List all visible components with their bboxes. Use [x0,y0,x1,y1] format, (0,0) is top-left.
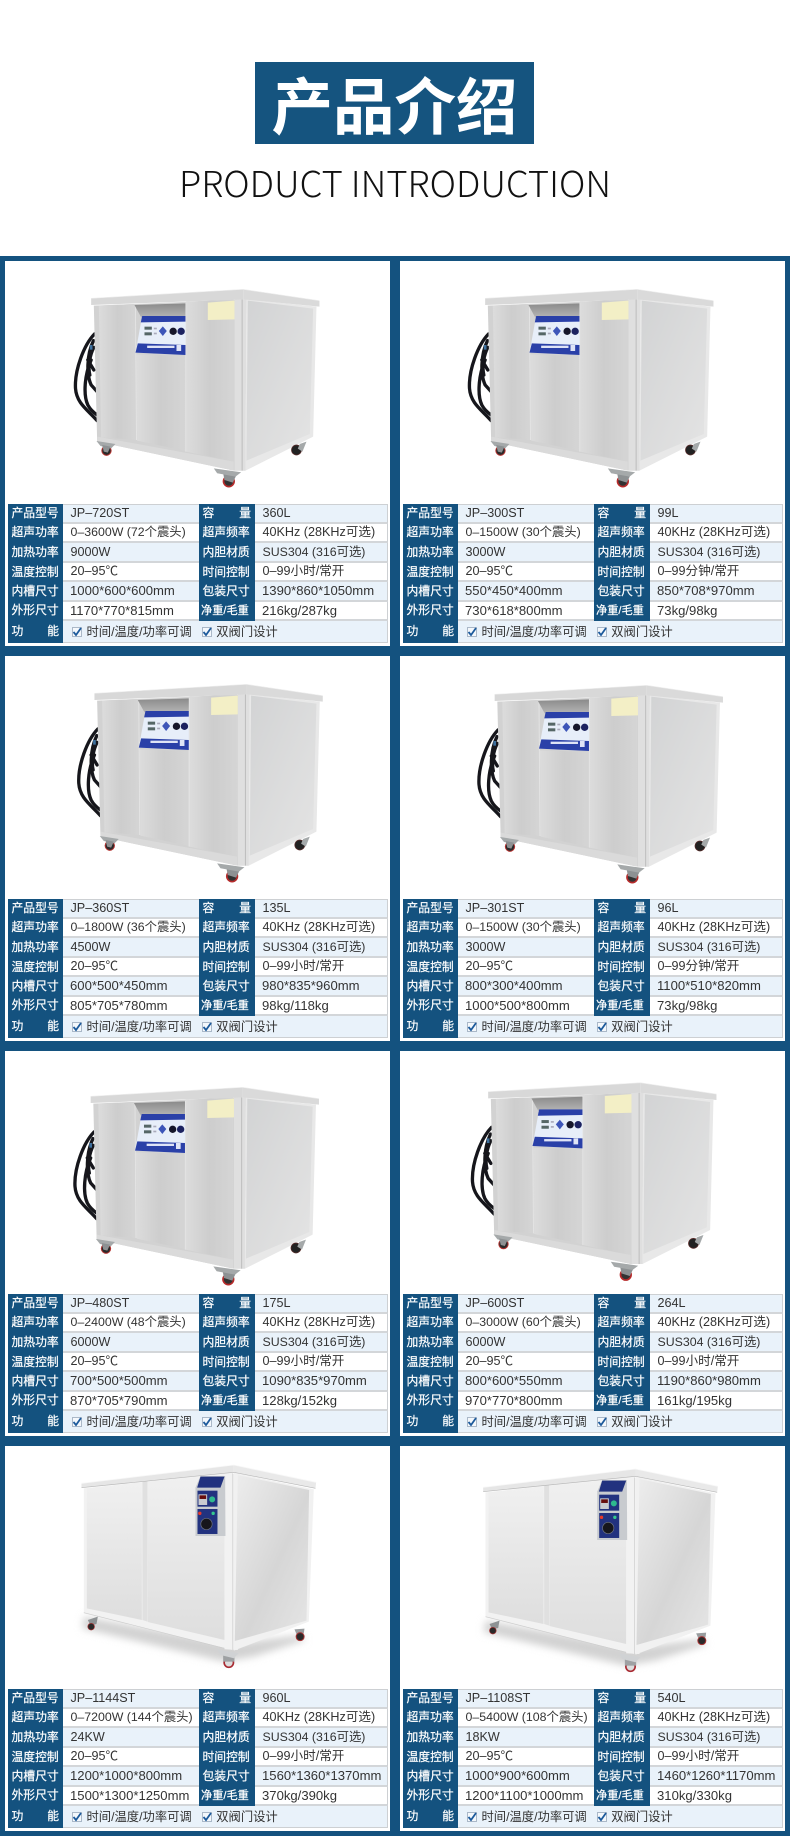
spec table: JP-360ST: 加热功率 [12,940,59,954]
spec table: JP-1108ST: 时间控制 [598,1750,645,1764]
spec table: JP-1108ST: 能 [442,1809,454,1823]
spec table: JP-300ST: 双阀门设计 [611,625,673,639]
spec table: JP-720ST: 216kg/287kg [262,603,337,618]
spec table: JP-300ST: 20–95℃ [466,564,513,578]
spec table: JP-1144ST: 20–95℃ [70,1749,118,1763]
spec table: JP-1108ST: 1200*1100*1000mm [465,1788,583,1803]
spec table: JP-300ST: 包装尺寸 [598,584,645,598]
spec table: JP-360ST: 双阀门设计 [216,1020,278,1034]
spec table: JP-480ST: 时间控制 [202,1355,250,1369]
spec table: JP-720ST: 时间/温度/功率可调 [86,625,192,639]
title banner: 产品介绍 [271,58,518,147]
spec table: JP-300ST: 外形尺寸 [406,603,454,617]
spec table: JP-1108ST: 内胆材质 [598,1730,645,1744]
spec table: JP-300ST: 3000W [466,545,505,559]
spec table: JP-300ST: 量 [634,506,646,520]
spec table: JP-300ST: 超声功率 [406,525,454,539]
spec table: JP-360ST: 805*705*780mm [70,998,168,1013]
spec table: JP-1108ST: 净重/毛重 [596,1790,644,1802]
spec table: JP-720ST: 40KHz (28KHz可选) [262,525,375,539]
spec table: JP-720ST: 内槽尺寸 [12,584,59,598]
spec table: JP-300ST: 温度控制 [406,565,454,579]
spec table: JP-360ST: 温度控制 [12,960,59,974]
spec table: JP-301ST: 量 [634,901,646,915]
spec table: JP-300ST: 功 [406,624,418,638]
spec table: JP-1108ST: 容 [598,1691,609,1705]
spec table: JP-360ST: 超声频率 [202,920,250,934]
spec table: JP-1144ST: 超声功率 [12,1710,59,1724]
spec table: JP-360ST: 能 [47,1019,59,1033]
panel: JP-360ST [4,656,390,1041]
spec table: JP-480ST: 容 [202,1296,214,1310]
spec table: JP-600ST: 1190*860*980mm [657,1373,761,1388]
spec table: JP-301ST: SUS304 (316可选) [658,940,760,954]
spec table: JP-600ST: 161kg/195kg [657,1393,732,1408]
panel: JP-301ST [400,656,785,1041]
spec table: JP-1144ST: 加热功率 [12,1730,59,1744]
spec table: JP-1144ST: 1500*1300*1250mm [70,1788,189,1803]
spec table: JP-1108ST: 加热功率 [406,1730,454,1744]
spec table: JP-1108ST: 1000*900*600mm [465,1768,570,1783]
spec table: JP-1144ST: 双阀门设计 [216,1810,278,1824]
spec table: JP-1108ST: 超声功率 [406,1710,454,1724]
panel: JP-720ST [4,261,390,646]
spec table: JP-300ST: SUS304 (316可选) [658,545,760,559]
product photo: JP-1108ST [482,1470,718,1672]
spec table: JP-301ST: 能 [442,1019,454,1033]
spec table: JP-360ST: 980*835*960mm [262,978,360,993]
spec table: JP-360ST: 净重/毛重 [201,1000,249,1012]
spec table: JP-1144ST: 内槽尺寸 [12,1769,59,1783]
spec table: JP-360ST: JP–360ST [70,901,129,915]
spec table: JP-720ST: 9000W [70,545,110,559]
spec table: JP-1144ST: 产品型号 [12,1691,59,1705]
spec table: JP-360ST: 内槽尺寸 [12,979,59,993]
spec table: JP-301ST: 超声频率 [598,920,645,934]
spec table: JP-301ST: 0–99分钟/常开 [658,959,739,973]
spec table: JP-480ST: 超声频率 [202,1315,250,1329]
spec table: JP-720ST: 产品型号 [12,506,59,520]
spec table: JP-600ST: 20–95℃ [466,1354,513,1368]
spec table: JP-1144ST: 时间/温度/功率可调 [86,1810,192,1824]
spec table: JP-480ST: 175L [262,1296,291,1310]
spec table: JP-301ST: 800*300*400mm [465,978,563,993]
spec table: JP-600ST: 加热功率 [406,1335,454,1349]
product photo: JP-301ST [477,685,723,884]
spec table: JP-720ST: 量 [239,506,251,520]
spec table: JP-1108ST: 内槽尺寸 [406,1769,454,1783]
spec table: JP-720ST: 时间控制 [202,565,250,579]
spec table: JP-300ST: 容 [598,506,609,520]
spec table: JP-600ST: 功 [406,1414,418,1428]
spec table: JP-1144ST: 1560*1360*1370mm [262,1768,381,1783]
spec table: JP-480ST: 包装尺寸 [202,1374,250,1388]
spec table: JP-1108ST: 量 [634,1691,646,1705]
spec table: JP-360ST: 40KHz (28KHz可选) [262,920,375,934]
spec table: JP-480ST: 双阀门设计 [216,1415,278,1429]
spec table: JP-1144ST: 超声频率 [202,1710,250,1724]
spec table: JP-600ST: 双阀门设计 [611,1415,673,1429]
spec table: JP-720ST: 1000*600*600mm [70,583,175,598]
spec table: JP-360ST: 量 [239,901,251,915]
spec table: JP-300ST: 99L [658,506,679,520]
spec table: JP-1108ST: 40KHz (28KHz可选) [658,1710,770,1724]
spec table: JP-1144ST: 容 [202,1691,214,1705]
product photo: JP-720ST [74,289,320,488]
spec table: JP-301ST: 净重/毛重 [596,1000,644,1012]
spec table: JP-301ST: 功 [406,1019,418,1033]
spec table: JP-301ST: 加热功率 [406,940,454,954]
spec table: JP-480ST: 加热功率 [12,1335,59,1349]
spec table: JP-300ST: 超声频率 [598,525,645,539]
panel: JP-1108ST [400,1446,785,1831]
spec table: JP-1108ST: 产品型号 [406,1691,454,1705]
spec table: JP-301ST: 内槽尺寸 [406,979,454,993]
spec table: JP-480ST: 0–2400W (48个震头) [70,1315,186,1329]
spec table: JP-600ST: 净重/毛重 [596,1395,644,1407]
spec table: JP-600ST: 外形尺寸 [406,1393,454,1407]
spec table: JP-480ST: 40KHz (28KHz可选) [262,1315,375,1329]
spec table: JP-720ST: 功 [12,624,23,638]
spec table: JP-1144ST: SUS304 (316可选) [262,1730,365,1744]
spec table: JP-1108ST [403,1689,783,1828]
spec table: JP-480ST: 6000W [70,1335,110,1349]
spec table: JP-300ST: 时间/温度/功率可调 [482,625,587,639]
spec table: JP-300ST: 0–99分钟/常开 [658,564,739,578]
spec table: JP-300ST: 加热功率 [406,545,454,559]
spec table: JP-600ST: 容 [598,1296,609,1310]
spec table: JP-301ST [403,899,783,1038]
spec table: JP-1144ST: 外形尺寸 [12,1788,59,1802]
spec table: JP-1108ST: JP–1108ST [466,1691,530,1705]
spec table: JP-1144ST: 能 [47,1809,59,1823]
product photo: JP-480ST [73,1087,319,1286]
spec table: JP-1144ST: 温度控制 [12,1750,59,1764]
spec table: JP-301ST: 容 [598,901,609,915]
spec table: JP-1108ST: SUS304 (316可选) [658,1730,760,1744]
spec table: JP-600ST: 264L [658,1296,686,1310]
spec table: JP-600ST: 6000W [466,1335,505,1349]
spec table: JP-300ST: 时间控制 [598,565,645,579]
panel: JP-1144ST [4,1446,390,1831]
spec table: JP-360ST: 时间控制 [202,960,250,974]
spec table: JP-600ST: 时间控制 [598,1355,645,1369]
spec table: JP-720ST: 360L [262,506,291,520]
spec table: JP-480ST: 量 [239,1296,251,1310]
spec table: JP-600ST: 超声功率 [406,1315,454,1329]
spec table: JP-1144ST: 包装尺寸 [202,1769,250,1783]
spec table: JP-600ST [403,1294,783,1433]
spec table: JP-1144ST: 净重/毛重 [201,1790,249,1802]
spec table: JP-1108ST: 0–99小时/常开 [658,1749,739,1763]
product photo: JP-600ST [470,1082,716,1281]
spec table: JP-300ST: 550*450*400mm [465,583,563,598]
spec table: JP-1144ST: 1200*1000*800mm [70,1768,182,1783]
spec table: JP-1108ST: 0–5400W (108个震头) [466,1710,588,1724]
spec table: JP-301ST: 20–95℃ [466,959,513,973]
spec table: JP-720ST: 净重/毛重 [201,605,249,617]
product photo: JP-360ST [77,684,323,882]
spec table: JP-1144ST: 时间控制 [202,1750,250,1764]
spec table: JP-300ST: 能 [442,624,454,638]
panel: JP-600ST [400,1051,785,1436]
spec table: JP-1108ST: 双阀门设计 [611,1810,673,1824]
spec table: JP-301ST: 3000W [466,940,505,954]
spec table: JP-301ST: 时间/温度/功率可调 [482,1020,587,1034]
spec table: JP-720ST: 0–99小时/常开 [262,564,344,578]
spec table: JP-1108ST: 外形尺寸 [406,1788,454,1802]
spec table: JP-360ST: SUS304 (316可选) [262,940,365,954]
spec table: JP-600ST: 970*770*800mm [465,1393,563,1408]
spec table: JP-300ST: 净重/毛重 [596,605,644,617]
spec table: JP-300ST: 内胆材质 [598,545,645,559]
spec table: JP-480ST [8,1294,388,1433]
spec table: JP-360ST: 功 [12,1019,23,1033]
spec table: JP-720ST: 0–3600W (72个震头) [70,525,186,539]
spec table: JP-300ST: JP–300ST [466,506,524,520]
spec table: JP-360ST: 时间/温度/功率可调 [86,1020,192,1034]
spec table: JP-301ST: 96L [658,901,679,915]
spec table: JP-301ST: 0–1500W (30个震头) [466,920,581,934]
spec table: JP-1108ST: 1460*1260*1170mm [657,1768,775,1783]
product photo: JP-1144ST [80,1466,316,1668]
spec table: JP-360ST: 产品型号 [12,901,59,915]
spec table: JP-1144ST: 量 [239,1691,251,1705]
spec table: JP-300ST: 0–1500W (30个震头) [466,525,581,539]
spec table: JP-360ST: 0–99小时/常开 [262,959,344,973]
spec table: JP-1144ST [8,1689,388,1828]
spec table: JP-480ST: 内胆材质 [202,1335,250,1349]
spec table: JP-600ST: SUS304 (316可选) [658,1335,760,1349]
spec table: JP-1144ST: JP–1144ST [70,1691,135,1705]
spec table: JP-300ST: 产品型号 [406,506,454,520]
spec table: JP-480ST: 功 [12,1414,23,1428]
spec table: JP-480ST: 700*500*500mm [70,1373,168,1388]
spec table: JP-1144ST: 40KHz (28KHz可选) [262,1710,375,1724]
spec table: JP-1108ST: 18KW [466,1730,500,1744]
spec table: JP-600ST: 0–3000W (60个震头) [466,1315,581,1329]
spec table: JP-480ST: 产品型号 [12,1296,59,1310]
spec table: JP-600ST: 时间/温度/功率可调 [482,1415,587,1429]
spec table: JP-1108ST: 功 [406,1809,418,1823]
spec table: JP-600ST: 包装尺寸 [598,1374,645,1388]
panel: JP-480ST [4,1051,390,1436]
spec table: JP-480ST: 0–99小时/常开 [262,1354,344,1368]
spec table: JP-301ST: 1100*510*820mm [657,978,761,993]
spec table: JP-301ST: 包装尺寸 [598,979,645,993]
spec table: JP-1144ST: 内胆材质 [202,1730,250,1744]
spec table: JP-720ST: 内胆材质 [202,545,250,559]
spec table: JP-720ST: 能 [47,624,59,638]
spec table: JP-720ST: 温度控制 [12,565,59,579]
spec table: JP-360ST: 0–1800W (36个震头) [70,920,186,934]
spec table: JP-1144ST: 370kg/390kg [262,1788,337,1803]
spec table: JP-360ST [8,899,388,1038]
spec table: JP-301ST: 超声功率 [406,920,454,934]
spec table: JP-301ST: 产品型号 [406,901,454,915]
spec table: JP-1108ST: 310kg/330kg [657,1788,732,1803]
spec table: JP-360ST: 超声功率 [12,920,59,934]
spec table: JP-301ST: 73kg/98kg [657,998,717,1013]
spec table: JP-720ST: 超声功率 [12,525,59,539]
spec table: JP-480ST: 时间/温度/功率可调 [86,1415,192,1429]
spec table: JP-360ST: 4500W [70,940,110,954]
spec table: JP-720ST: 20–95℃ [70,564,118,578]
spec table: JP-300ST: 850*708*970mm [657,583,755,598]
spec table: JP-301ST: 外形尺寸 [406,998,454,1012]
spec table: JP-720ST: 包装尺寸 [202,584,250,598]
spec table: JP-360ST: 外形尺寸 [12,998,59,1012]
spec table: JP-600ST: 能 [442,1414,454,1428]
spec table: JP-301ST: 1000*500*800mm [465,998,570,1013]
product photo: JP-300ST [468,289,714,488]
spec table: JP-720ST: 外形尺寸 [12,603,59,617]
spec table: JP-480ST: 超声功率 [12,1315,59,1329]
spec table: JP-720ST: JP–720ST [70,506,129,520]
spec table: JP-1108ST: 540L [658,1691,686,1705]
spec table: JP-600ST: 产品型号 [406,1296,454,1310]
spec table: JP-720ST: 容 [202,506,214,520]
spec table: JP-1108ST: 包装尺寸 [598,1769,645,1783]
spec table: JP-600ST: 温度控制 [406,1355,454,1369]
spec table: JP-300ST: 内槽尺寸 [406,584,454,598]
panel: JP-300ST [400,261,785,646]
spec table: JP-1144ST: 功 [12,1809,23,1823]
spec table: JP-480ST: 20–95℃ [70,1354,118,1368]
spec table: JP-600ST: 量 [634,1296,646,1310]
spec table: JP-600ST: 超声频率 [598,1315,645,1329]
spec table: JP-300ST: 730*618*800mm [465,603,563,618]
spec table: JP-300ST: 40KHz (28KHz可选) [658,525,770,539]
spec table: JP-720ST [8,504,388,643]
spec table: JP-720ST: 1390*860*1050mm [262,583,374,598]
spec table: JP-360ST: 包装尺寸 [202,979,250,993]
spec table: JP-1144ST: 24KW [70,1730,105,1744]
spec table: JP-301ST: 内胆材质 [598,940,645,954]
spec table: JP-480ST: 净重/毛重 [201,1395,249,1407]
spec table: JP-480ST: 内槽尺寸 [12,1374,59,1388]
spec table: JP-1108ST: 时间/温度/功率可调 [482,1810,587,1824]
spec table: JP-1108ST: 20–95℃ [466,1749,513,1763]
spec table: JP-480ST: SUS304 (316可选) [262,1335,365,1349]
spec table: JP-480ST: JP–480ST [70,1296,129,1310]
spec table: JP-720ST: 超声频率 [202,525,250,539]
spec table: JP-1108ST: 温度控制 [406,1750,454,1764]
spec table: JP-360ST: 600*500*450mm [70,978,168,993]
spec table: JP-600ST: 800*600*550mm [465,1373,563,1388]
spec table: JP-720ST: 加热功率 [12,545,59,559]
spec table: JP-360ST: 135L [262,901,291,915]
spec table: JP-301ST: 40KHz (28KHz可选) [658,920,770,934]
spec table: JP-1144ST: 0–7200W (144个震头) [70,1710,193,1724]
spec table: JP-301ST: 温度控制 [406,960,454,974]
spec table: JP-1144ST: 0–99小时/常开 [262,1749,344,1763]
spec table: JP-720ST: SUS304 (316可选) [262,545,365,559]
spec table: JP-480ST: 128kg/152kg [262,1393,337,1408]
spec table: JP-1108ST: 超声频率 [598,1710,645,1724]
spec table: JP-360ST: 98kg/118kg [262,998,329,1013]
spec table: JP-360ST: 内胆材质 [202,940,250,954]
spec table: JP-720ST: 双阀门设计 [216,625,278,639]
spec table: JP-360ST: 容 [202,901,214,915]
spec table: JP-600ST: 0–99小时/常开 [658,1354,739,1368]
spec table: JP-480ST: 能 [47,1414,59,1428]
spec table: JP-600ST: JP–600ST [466,1296,524,1310]
spec table: JP-720ST: 1170*770*815mm [70,603,174,618]
spec table: JP-480ST: 温度控制 [12,1355,59,1369]
spec table: JP-600ST: 40KHz (28KHz可选) [658,1315,770,1329]
spec table: JP-300ST: 73kg/98kg [657,603,717,618]
spec table: JP-600ST: 内胆材质 [598,1335,645,1349]
spec table: JP-480ST: 1090*835*970mm [262,1373,367,1388]
spec table: JP-301ST: JP–301ST [466,901,524,915]
spec table: JP-480ST: 870*705*790mm [70,1393,168,1408]
spec table: JP-360ST: 20–95℃ [70,959,118,973]
spec table: JP-300ST [403,504,783,643]
spec table: JP-1144ST: 960L [262,1691,291,1705]
spec table: JP-480ST: 外形尺寸 [12,1393,59,1407]
spec table: JP-600ST: 内槽尺寸 [406,1374,454,1388]
spec table: JP-301ST: 时间控制 [598,960,645,974]
spec table: JP-301ST: 双阀门设计 [611,1020,673,1034]
